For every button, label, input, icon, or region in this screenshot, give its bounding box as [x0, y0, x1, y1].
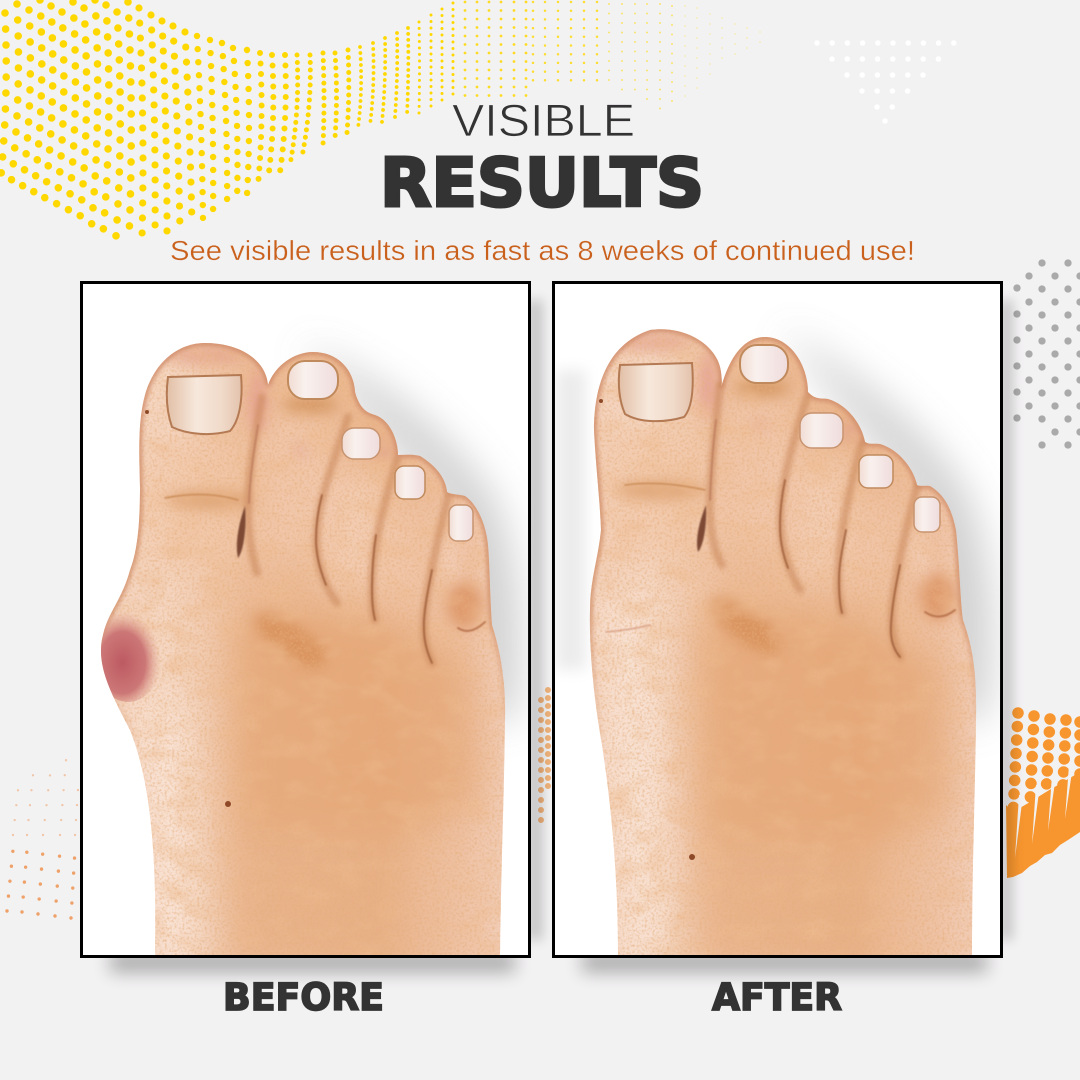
- decorative orange dot wave right: [1006, 713, 1080, 878]
- decorative orange dots between panels: [541, 690, 548, 830]
- foot edge shading: [590, 329, 976, 745]
- toe gaps soft shade: [248, 397, 448, 663]
- toe gaps: [165, 425, 485, 663]
- toenails: [167, 361, 473, 541]
- panel: after photo: [554, 282, 1002, 960]
- title: RESULTS: RESULTS: [380, 144, 704, 222]
- skin tone variation: [140, 410, 480, 960]
- decorative yellow dot wave: [0, 0, 760, 237]
- decorative grey dots right: [1017, 263, 1080, 458]
- skin spots: [145, 410, 231, 807]
- left edge soft shadow: [556, 370, 586, 670]
- foot after treatment: [585, 325, 985, 960]
- toe gaps soft shade: [710, 385, 917, 657]
- toe tints: [163, 346, 483, 677]
- decorative faint orange dots left: [7, 760, 78, 918]
- dark gap between big toe and second toe: [237, 506, 246, 558]
- toe gaps: [606, 420, 955, 657]
- toenails: [619, 345, 940, 532]
- panel shadows: [110, 300, 1012, 972]
- foot edge shading: [101, 343, 505, 727]
- label: before: BEFORE: [223, 976, 384, 1019]
- title: VISIBLE: VISIBLE: [452, 95, 635, 146]
- foot cast shadow: [300, 345, 520, 720]
- panel: before photo: [82, 282, 530, 960]
- bunion redness: [101, 614, 158, 702]
- foot cast shadow: [780, 330, 992, 720]
- skin tone variation: [596, 395, 950, 960]
- skin texture: [585, 325, 985, 960]
- foot with bunion: [93, 335, 515, 960]
- toe tints: [608, 333, 956, 662]
- subtitle: See visible results in as fast as 8 weeks of continued use!: [170, 235, 915, 266]
- label: after: AFTER: [712, 976, 842, 1019]
- skin texture: [95, 335, 515, 960]
- dark gap between big toe and second toe: [697, 505, 706, 552]
- decorative white dot triangle: [817, 43, 958, 123]
- skin spots: [599, 399, 695, 860]
